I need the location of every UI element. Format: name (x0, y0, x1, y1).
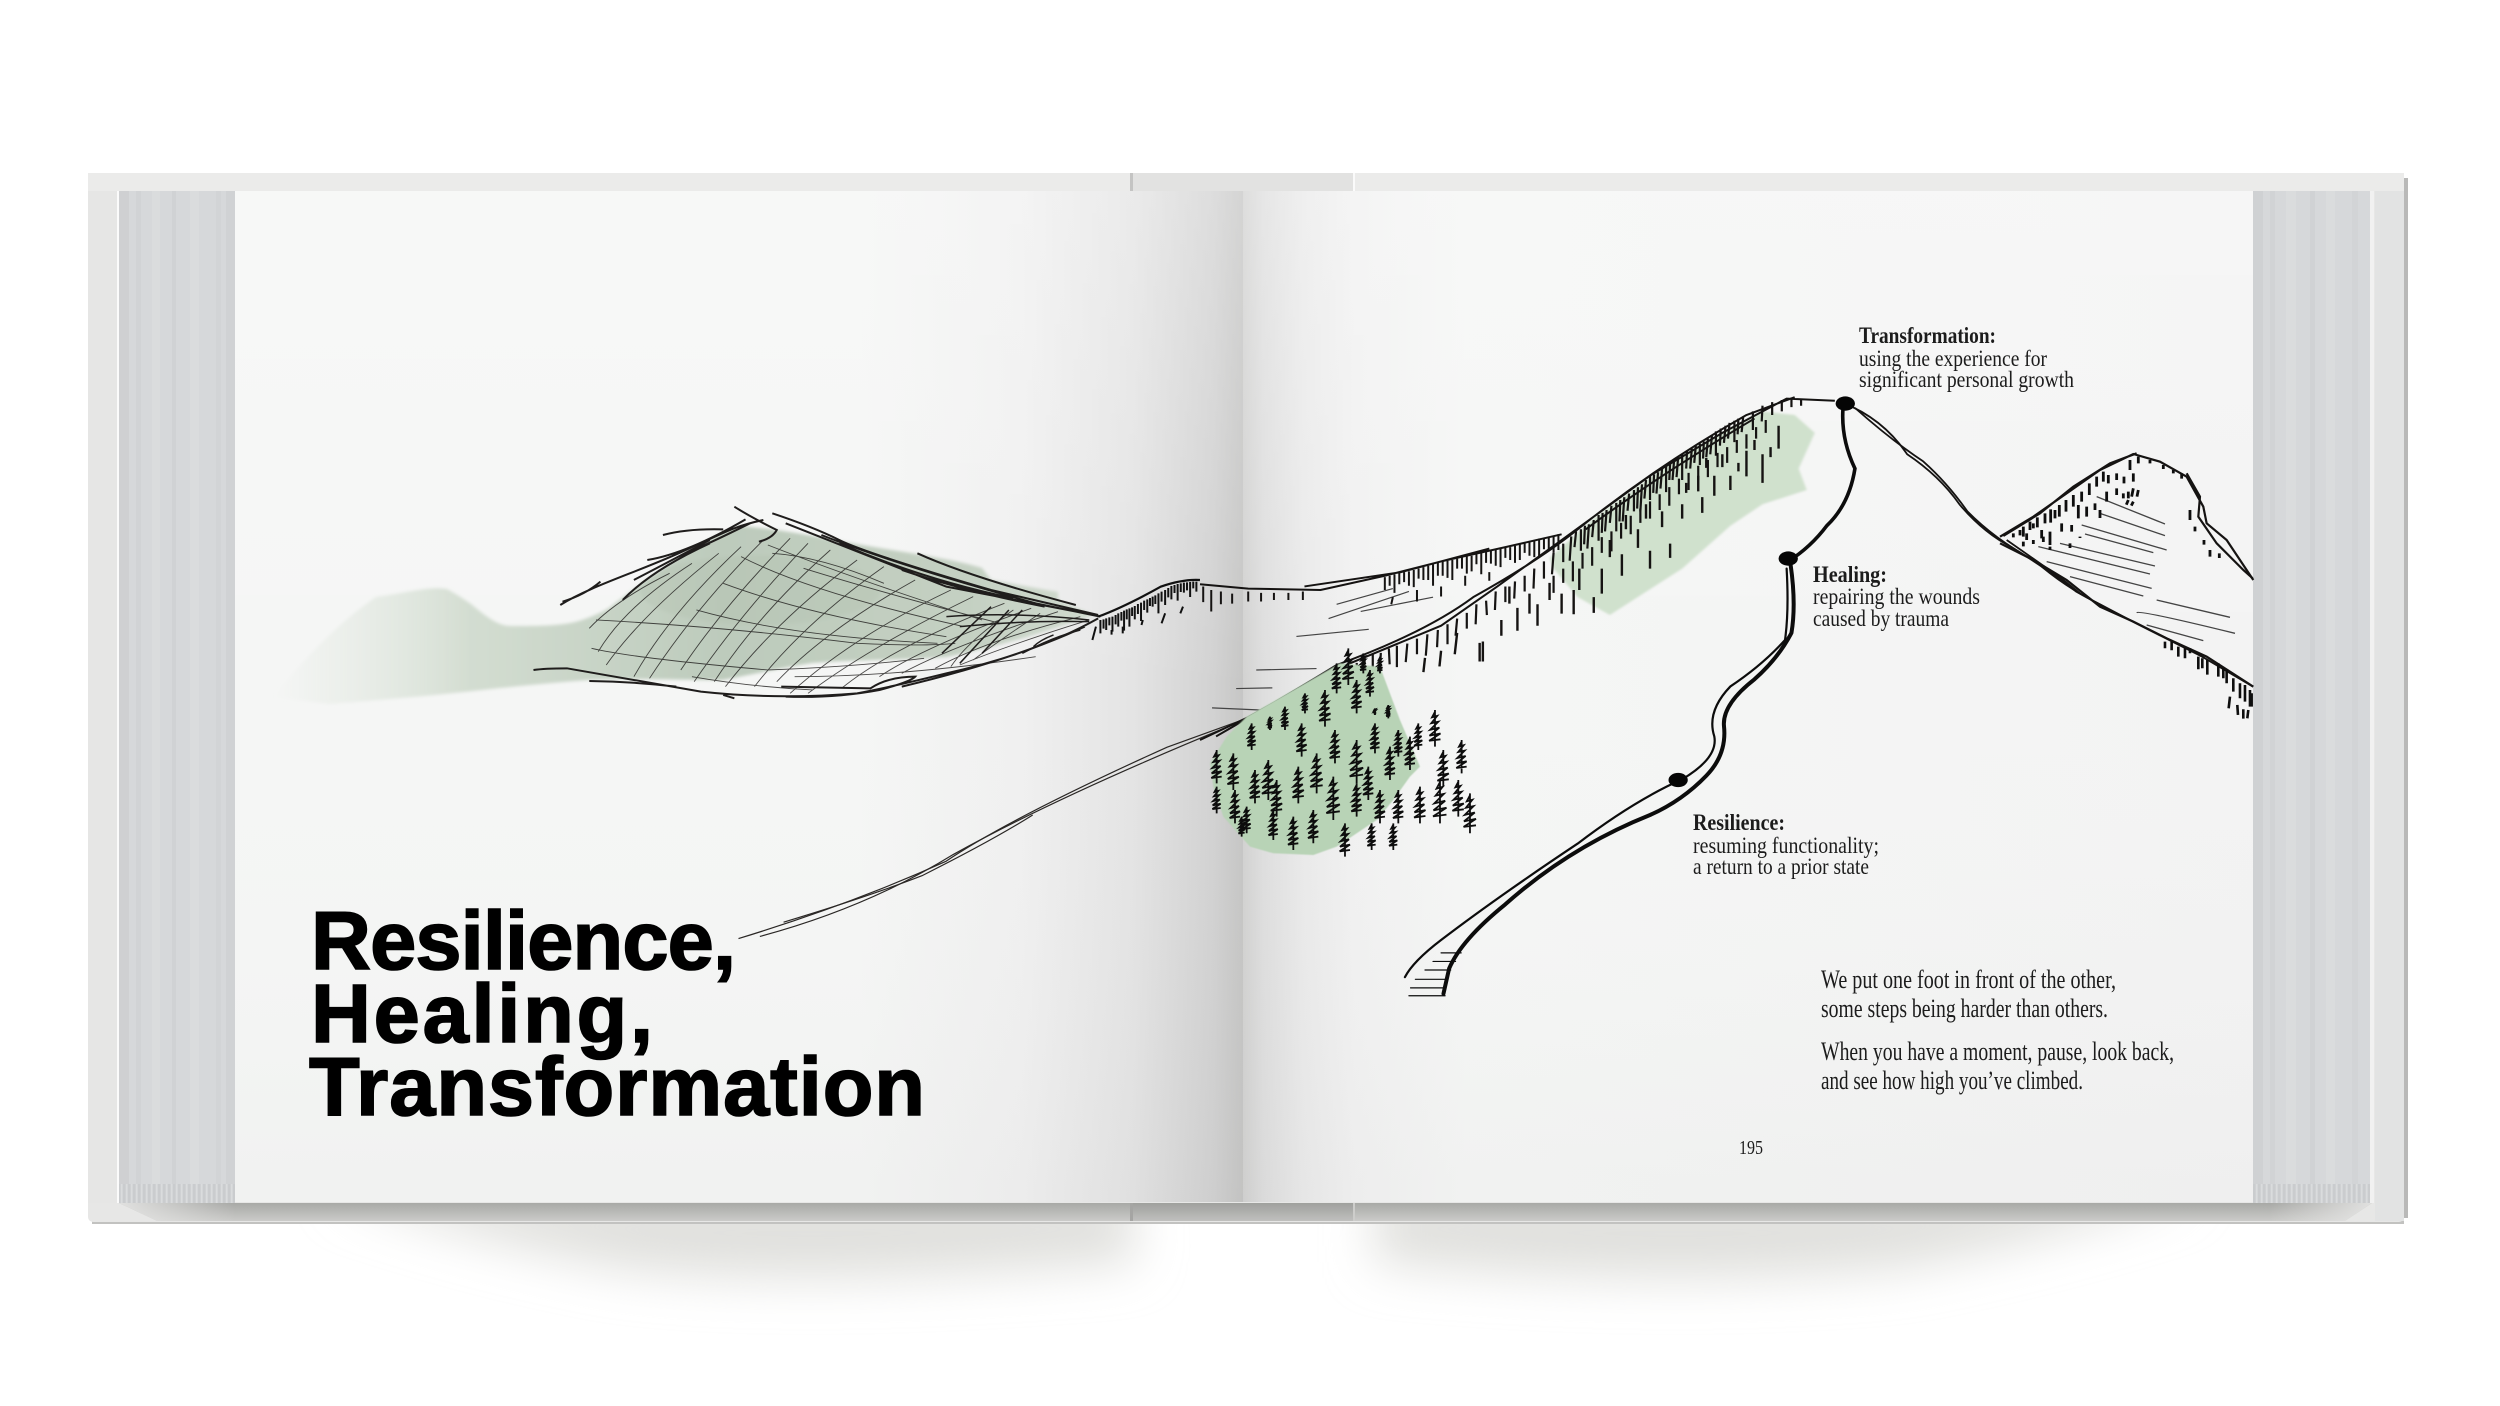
title: Resilience, (311, 894, 736, 987)
label: healing: caused by trauma (1813, 606, 1949, 631)
body text: When you have a moment, pause, look back, (1821, 1037, 2174, 1066)
drawing: left mountain grid (533, 507, 1100, 698)
body text: and see how high you’ve climbed. (1821, 1066, 2083, 1095)
shading lines (1212, 589, 1433, 710)
page edges: right (2253, 191, 2374, 1203)
title (309, 894, 925, 1133)
ground shadow under book (330, 1190, 2200, 1278)
green wash: left mountain (273, 526, 1094, 704)
slope hatching (1339, 399, 1801, 689)
milestone dots (1668, 396, 1855, 787)
drawing: long ridge line down the left page (739, 719, 1246, 939)
drawing: right page slope and ridges (1200, 397, 2253, 740)
drawing: forest of trees (1211, 648, 1476, 857)
title: Transformation (309, 1040, 925, 1133)
ridge strokes (533, 507, 1100, 698)
label: resilience: a return to a prior state (1693, 854, 1869, 879)
page edges: left (117, 191, 235, 1203)
lower ridge hatching (1203, 534, 1558, 611)
label: transformation: using the experience for (1859, 346, 2047, 371)
drawing: far peak (2000, 453, 2253, 719)
body text: some steps being harder than others. (1821, 994, 2108, 1023)
label: healing (1813, 562, 1980, 631)
shading lines (2038, 497, 2235, 641)
label: resilience (1693, 810, 1879, 879)
path from base to summit (1405, 396, 1855, 996)
body text (1821, 965, 2174, 1095)
grid meridians (589, 538, 1089, 693)
green wash: forest (1210, 663, 1420, 855)
label: resilience: resuming functionality; (1693, 833, 1879, 858)
main ridge (1200, 397, 1835, 740)
lower ridge (1200, 534, 1562, 590)
label: healing: repairing the wounds (1813, 584, 1980, 609)
label: transformation: Transformation: (1859, 323, 1996, 348)
page number: 195 (1739, 1137, 1763, 1159)
label: transformation (1859, 323, 2074, 392)
green wash: upper slope (1550, 411, 1815, 615)
label: transformation: significant personal growth (1859, 367, 2074, 392)
drawing: centre hills (1092, 580, 1200, 640)
body text: We put one foot in front of the other, (1821, 965, 2116, 994)
summit to far peak slope (1843, 403, 2253, 686)
title: Healing, (311, 967, 653, 1060)
stipple (2013, 457, 2219, 558)
bottom inner shadow band (119, 1203, 2372, 1221)
book cover (88, 173, 2408, 1224)
right page (1243, 191, 2253, 1202)
label: healing: Healing: (1813, 562, 1887, 587)
label: resilience: Resilience: (1693, 810, 1785, 835)
left page (235, 191, 1243, 1202)
